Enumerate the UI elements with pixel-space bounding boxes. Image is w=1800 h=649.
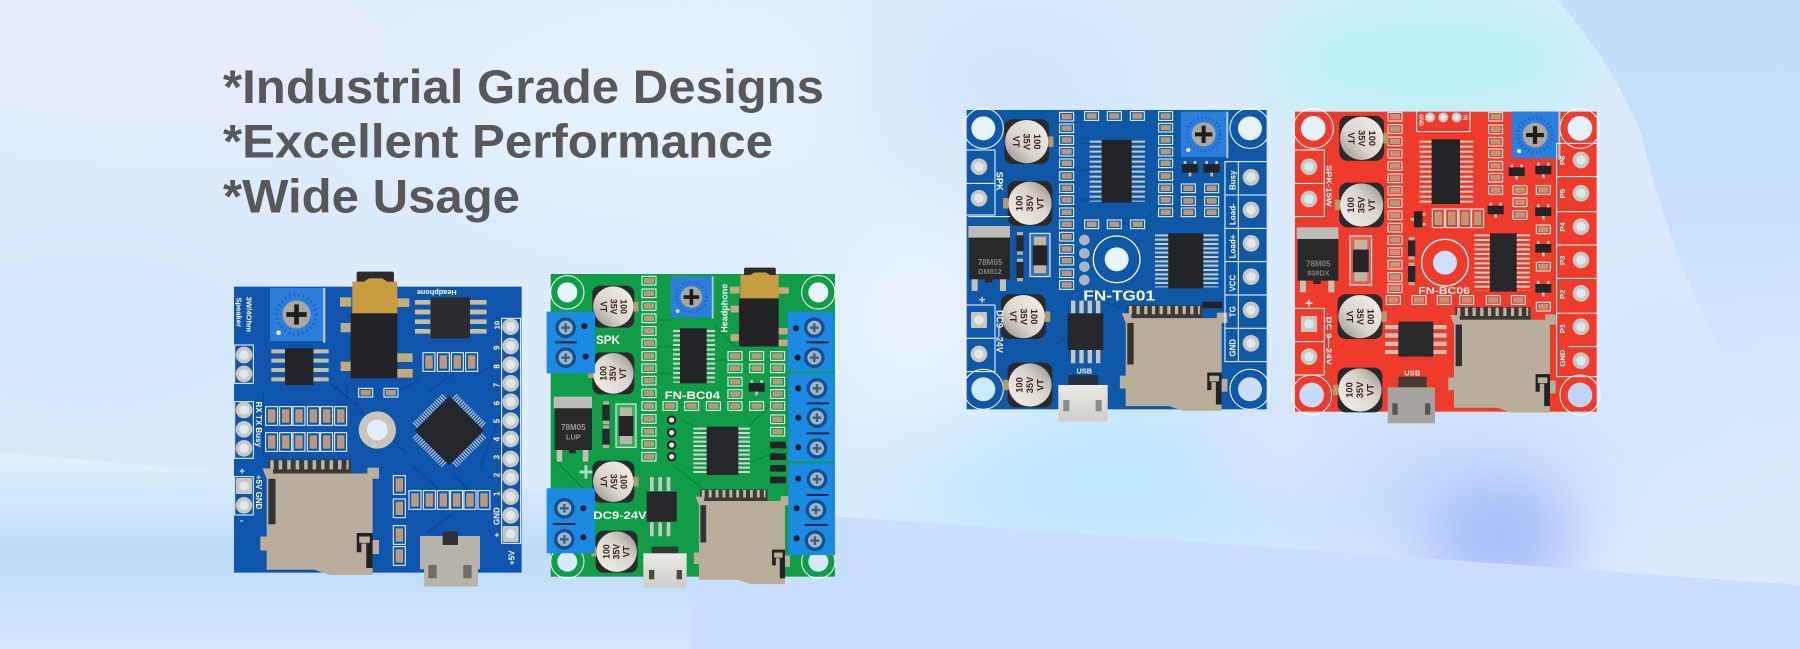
capacitors: 35V <box>1357 196 1367 213</box>
capacitors: 100 <box>618 299 628 314</box>
capacitors: 100 <box>1015 196 1025 211</box>
silkscreen labels: DC 9—24V <box>1324 317 1333 365</box>
capacitors: VT <box>621 545 631 557</box>
regulator 78M05: 78M05 <box>978 258 1003 267</box>
silkscreen labels: 8 <box>492 364 501 369</box>
pads and frames <box>967 150 1267 372</box>
header GND box: IN <box>1462 115 1468 120</box>
pcb <box>551 274 835 577</box>
diodes <box>1016 232 1050 281</box>
capacitors <box>1001 119 1054 407</box>
silkscreen labels: 1 <box>492 491 501 496</box>
chip: decoder <box>1482 233 1523 292</box>
silkscreen labels: GND <box>1229 339 1238 357</box>
silkscreen labels: 3 <box>492 454 501 459</box>
diodes <box>602 401 636 448</box>
capacitors: 35V <box>1025 376 1035 393</box>
silkscreen labels <box>235 288 517 565</box>
capacitors: 100 <box>598 366 608 381</box>
capacitors: 100 <box>1345 382 1355 398</box>
SD card slot <box>260 460 379 575</box>
silkscreen labels <box>1305 156 1567 377</box>
chip: flash memory <box>647 484 677 529</box>
regulator 78M05 <box>968 226 1010 291</box>
silkscreen labels: + <box>578 457 594 487</box>
chip: flash memory <box>1068 307 1103 357</box>
silkscreen labels: Load- <box>1229 203 1238 225</box>
silkscreen labels: - <box>240 515 243 525</box>
silkscreen labels: 4 <box>492 436 501 441</box>
chip: driver <box>1426 139 1467 204</box>
silkscreen labels: 10 <box>492 321 501 329</box>
silkscreen labels: Speaker <box>235 297 244 327</box>
title text block: *Excellent Performance <box>223 114 773 168</box>
silkscreen labels: VCC <box>1229 275 1238 292</box>
header GND box <box>1417 112 1470 132</box>
capacitors: 100 <box>618 474 628 489</box>
capacitors <box>588 286 639 573</box>
silkscreen labels: FN-BC06 <box>1418 286 1471 297</box>
silkscreen labels: P6 <box>1558 156 1567 165</box>
capacitors: 35V <box>609 474 619 490</box>
capacitors: 35V <box>608 365 618 381</box>
micro USB port <box>643 547 687 588</box>
silkscreen labels <box>979 170 1238 375</box>
potentiometer <box>1512 112 1560 160</box>
silkscreen labels <box>578 284 730 522</box>
mounting holes <box>1292 108 1600 415</box>
potentiometer <box>270 288 325 343</box>
silkscreen labels: P3 <box>1558 256 1567 265</box>
transistors <box>1182 161 1222 308</box>
header GND box: GND <box>1418 114 1424 126</box>
capacitors: 35V <box>609 299 619 315</box>
chip: driver <box>1096 140 1138 203</box>
resistors <box>642 276 785 461</box>
micro USB port <box>1058 375 1108 422</box>
silkscreen labels: + <box>239 466 245 476</box>
right header pads <box>502 318 521 543</box>
floor plane: right <box>690 506 1800 649</box>
capacitors: VT <box>599 476 609 488</box>
regulator 78M05: LUP <box>566 432 581 441</box>
board: red FN-BC06 <box>1292 108 1600 423</box>
board: green FN-BC04 <box>547 268 835 588</box>
capacitors: 100 <box>1367 131 1377 146</box>
silkscreen labels: SPK <box>995 172 1005 191</box>
silkscreen labels: DC9-24V <box>593 510 647 522</box>
capacitors: 35V <box>1355 308 1365 326</box>
resistors <box>1386 112 1550 311</box>
pads and frames <box>1295 143 1597 377</box>
capacitors: 35V <box>1357 130 1367 147</box>
capacitors: VT <box>1346 132 1356 145</box>
capacitors: 35V <box>611 544 621 559</box>
regulator 78M05 <box>554 397 592 462</box>
headphone jack <box>730 268 792 347</box>
capacitors: 35V <box>1355 381 1365 398</box>
regulator 78M05: 78M05 <box>561 423 586 432</box>
silkscreen labels: +5V <box>508 550 517 565</box>
chip: amplifier <box>278 348 321 385</box>
resistors <box>266 353 490 565</box>
diodes <box>1350 236 1415 285</box>
silkscreen labels: 5 <box>492 418 501 423</box>
pcb <box>234 287 522 573</box>
pcb <box>1295 112 1597 412</box>
silkscreen labels: SPK <box>596 334 621 347</box>
capacitors: VT <box>1011 136 1021 148</box>
mounting holes <box>551 276 835 578</box>
silkscreen labels: + <box>1305 295 1313 310</box>
silkscreen labels: GND <box>492 507 501 525</box>
pcb <box>967 110 1267 409</box>
test pads <box>1079 235 1090 285</box>
capacitors: VT <box>1365 384 1375 396</box>
silkscreen labels: Load+ <box>1229 234 1238 258</box>
silkscreen labels: 2 <box>492 472 501 477</box>
chip: decoder <box>1162 233 1211 288</box>
regulator 78M05: 78M05 <box>1306 260 1331 269</box>
silkscreen labels: SPK-15W <box>1324 165 1333 207</box>
title text block: *Wide Usage <box>223 170 520 222</box>
silkscreen labels: P1 <box>1558 323 1567 333</box>
capacitors: VT <box>1345 311 1355 323</box>
silkscreen labels: USB <box>1404 368 1420 377</box>
capacitors: VT <box>618 367 628 379</box>
silkscreen labels: 9 <box>492 345 501 350</box>
capacitors: 100 <box>1029 309 1039 324</box>
silkscreen labels: P5 <box>1558 188 1567 198</box>
SD card slot <box>1120 305 1227 411</box>
chip: flash memory <box>1392 322 1440 357</box>
chip: decoder <box>700 427 744 475</box>
regulator 78M05: DM812 <box>978 267 1002 276</box>
silkscreen labels: 7 <box>492 382 501 387</box>
silkscreen labels: TG <box>1229 306 1238 317</box>
chip: flash memory <box>423 297 478 338</box>
capacitors: VT <box>1035 197 1045 209</box>
silkscreen labels: +5V GND <box>254 475 263 510</box>
micro USB port <box>1388 377 1435 423</box>
capacitors: 100 <box>1346 197 1356 213</box>
mounting holes <box>963 108 1270 409</box>
capacitors: 35V <box>1022 133 1032 151</box>
terminal blocks <box>547 312 835 555</box>
capacitors: 100 <box>602 544 612 559</box>
headphone jack <box>340 272 413 378</box>
silkscreen labels: P4 <box>1558 222 1567 232</box>
potentiometer <box>1181 112 1228 158</box>
resistors <box>1060 112 1219 289</box>
silkscreen labels: 6 <box>492 400 501 405</box>
board: blue headphone module <box>234 272 522 587</box>
title text block <box>223 60 824 222</box>
micro USB port <box>420 532 480 587</box>
potentiometer <box>671 277 714 319</box>
board: blue FN-TG01 <box>963 108 1270 422</box>
capacitors: VT <box>1035 379 1045 391</box>
silkscreen labels: + <box>979 294 985 306</box>
capacitors <box>1333 116 1389 412</box>
silkscreen labels: Headphone <box>720 284 730 333</box>
silkscreen labels: FN-TG01 <box>1083 288 1155 305</box>
chip: driver <box>677 328 711 383</box>
mounting hole <box>359 411 396 449</box>
capacitors: 35V <box>1018 308 1028 326</box>
silkscreen labels: P2 <box>1558 290 1567 299</box>
small transistors <box>749 380 786 483</box>
silkscreen labels: 3W/4Ohm <box>245 297 254 332</box>
capacitors: VT <box>1008 311 1018 323</box>
silkscreen labels: GND <box>1558 349 1567 367</box>
capacitors: VT <box>599 301 609 313</box>
silkscreen labels: Headphone <box>417 288 457 297</box>
capacitors: 100 <box>1032 134 1042 149</box>
silkscreen labels: Busy <box>1229 170 1238 190</box>
QFP processor <box>410 391 489 470</box>
silkscreen labels: DC9—24V <box>995 310 1005 353</box>
transistors <box>1410 163 1551 296</box>
capacitors: VT <box>1367 199 1377 211</box>
background facet: upper right <box>1558 0 1800 480</box>
SD card slot <box>694 489 790 584</box>
capacitors: 100 <box>1015 377 1025 393</box>
test holes <box>668 416 675 460</box>
regulator 78M05 <box>1297 227 1338 292</box>
SD card slot <box>1448 307 1556 413</box>
left pads <box>235 345 253 515</box>
silkscreen labels: USB <box>1077 366 1092 375</box>
silkscreen labels: FN-BC04 <box>665 390 721 402</box>
capacitors: 100 <box>1365 309 1375 324</box>
floor plane: left <box>0 453 690 649</box>
silkscreen labels: RX TX Busy <box>254 402 263 447</box>
silkscreen labels: + <box>492 532 501 537</box>
title text block: *Industrial Grade Designs <box>223 60 824 113</box>
capacitors: 35V <box>1025 194 1035 212</box>
regulator 78M05: 938DX <box>1307 269 1330 278</box>
